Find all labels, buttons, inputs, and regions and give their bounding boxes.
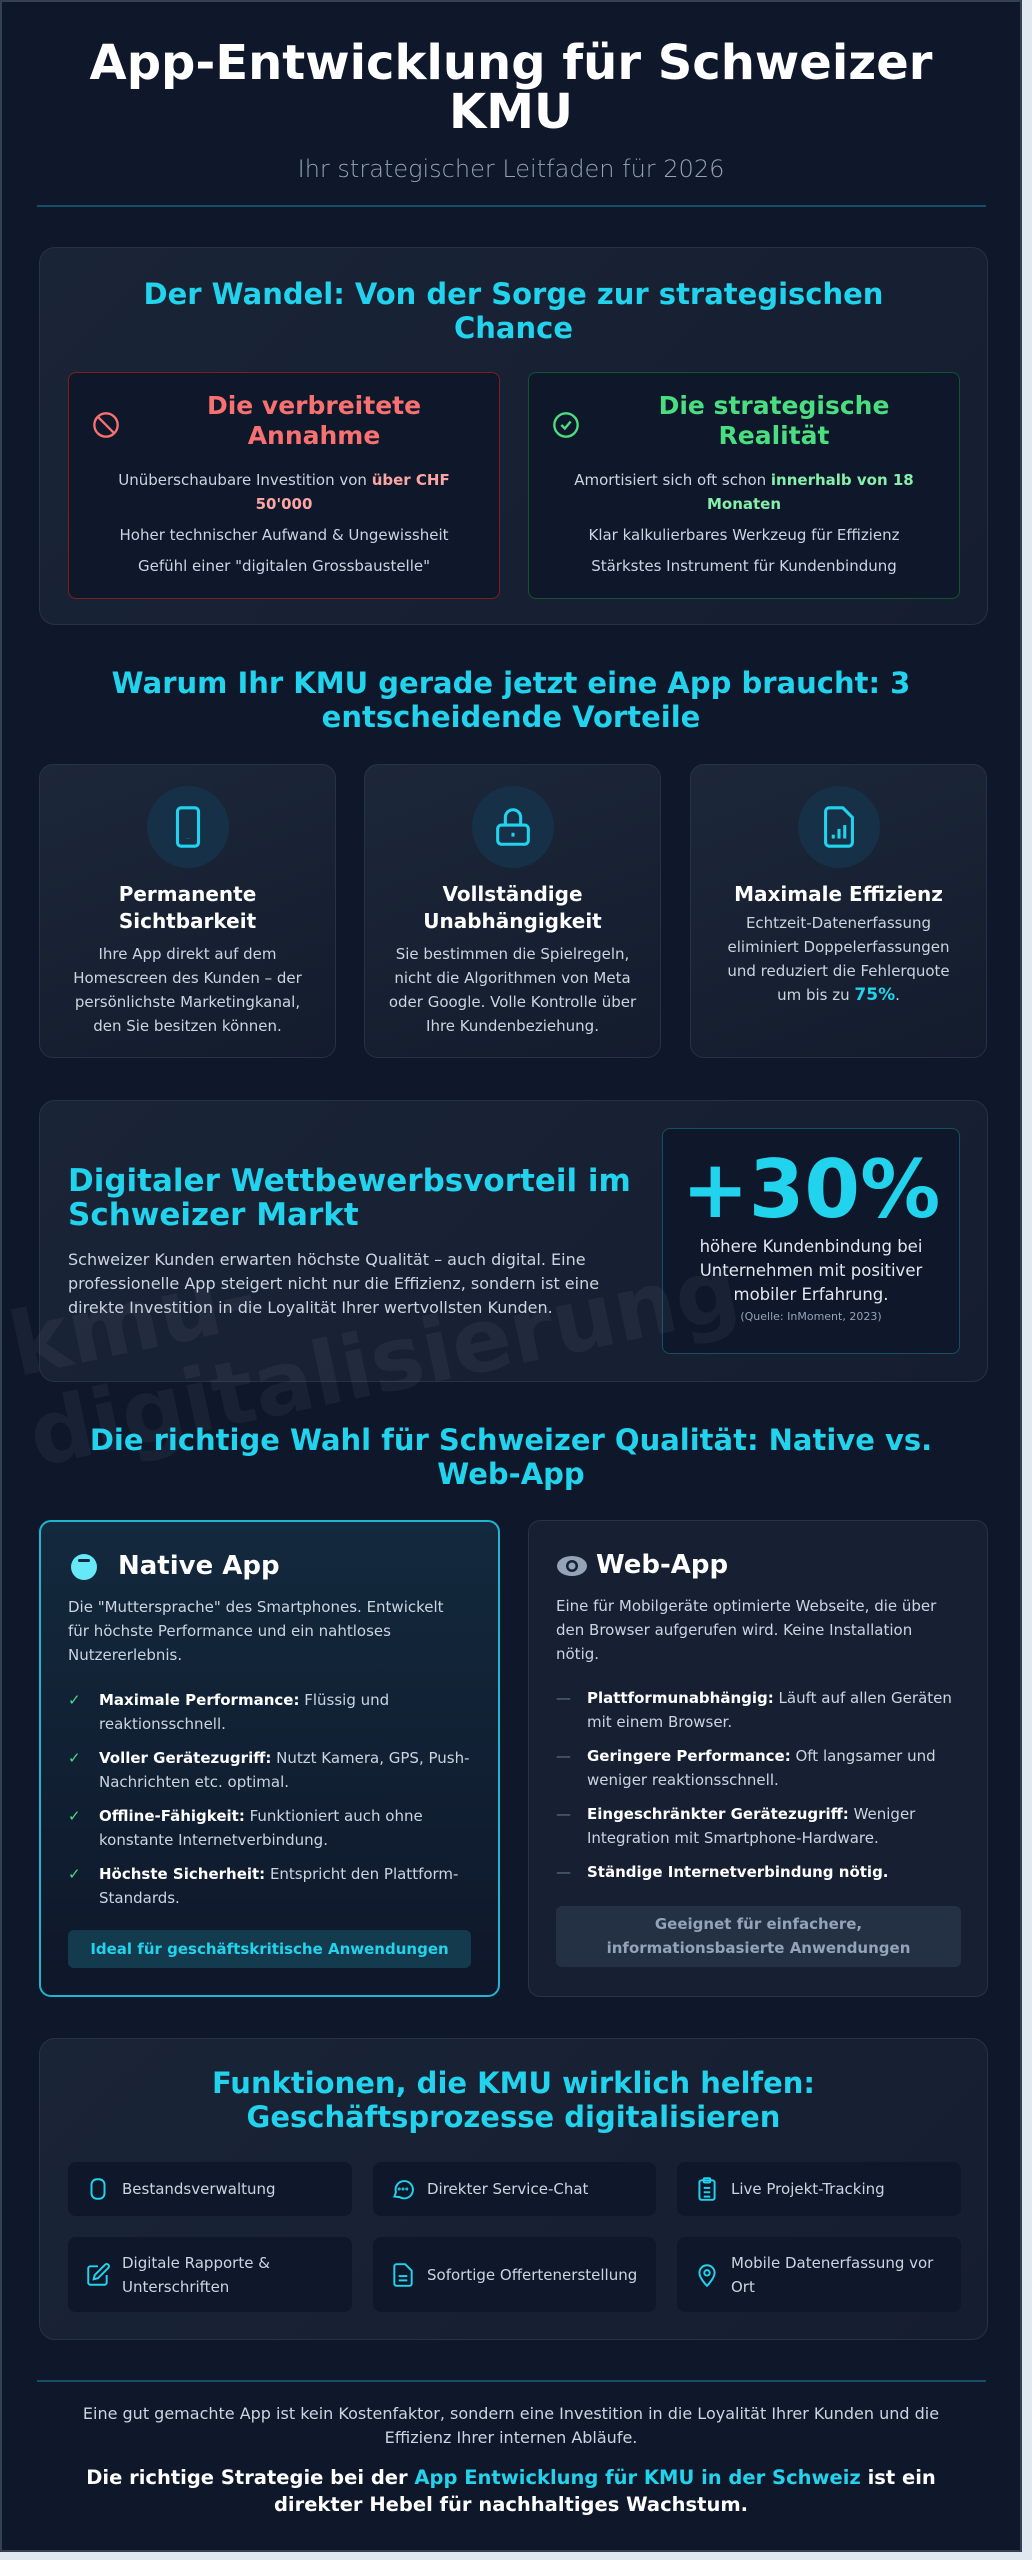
footer text: Eine gut gemachte App ist kein Kostenfaktor, sondern eine Investition in die Loyalität Ihrer Kunden und die Effizienz Ihrer internen Abläufe. [83,2404,939,2447]
heading: Der Wandel [144,277,883,345]
text: Realität list [574,471,914,575]
tile: Service-Chat [373,2162,656,2216]
stat box: +30%: höhere Kundenbindung bei [700,1237,922,1256]
text: Native desc: Die "Muttersprache" des Smartphones. Entwickelt für höchste Performance und ein nahtloses Nutzererlebnis. [68,1598,444,1664]
stat box: +30%: (Quelle: InMoment, 2023) [740,1310,882,1323]
card: Permanente Sichtbarkeit: Sichtbarkeit [119,909,256,933]
box: strategische Realität [528,372,960,599]
list: Web bullets: — [556,1689,571,1707]
heading: Realität: Die strategische [659,391,889,420]
tile: Bestandsverwaltung: Bestandsverwaltung [122,2180,276,2198]
heading: Wettbewerbsvorteil [68,1163,631,1233]
card: Permanente Sichtbarkeit: Permanente [119,882,256,906]
list: Native bullets [68,1691,470,1907]
heading: Annahme [207,391,421,450]
tile: Rapporte: Digitale Rapporte & [122,2254,270,2272]
icon: eye [557,1556,587,1576]
icon: ban [93,412,119,438]
tile: Projekt-Tracking [677,2162,961,2216]
heading: Realität: Realität [718,421,830,450]
heading: Wettbewerbsvorteil: Digitaler Wettbewerbsvorteil im [68,1163,631,1199]
tile: Rapporte [68,2237,352,2312]
heading: Native vs Web: Web-App [437,1457,585,1491]
tile: Service-Chat: Direkter Service-Chat [427,2180,588,2198]
title: App-Entwicklung für Schweizer [90,35,932,91]
heading: Native vs Web [90,1423,932,1491]
tile: Projekt-Tracking: Live Projekt-Tracking [731,2180,885,2198]
footer conclusion: Die richtige Strategie bei der App Entwicklung für KMU in der Schweiz ist ein direkter Hebel für nachhaltiges Wachstum. [86,2466,936,2516]
panel: Wettbewerbsvorteil [39,1100,988,1382]
list: Web bullets: — [556,1863,571,1881]
text: Realität list: Stärkstes Instrument für Kundenbindung [591,557,897,575]
tile: Offertenerstellung: Sofortige Offertenerstellung [427,2266,637,2284]
card: Unabhängigkeit: Sie bestimmen die Spielregeln, nicht die Algorithmen von Meta oder Google. Volle Kontrolle über Ihre Kundenbeziehung. [389,945,636,1035]
card: Permanente Sichtbarkeit [39,764,336,1058]
heading: 3 Vorteile: entscheidende Vorteile [322,700,700,734]
tile: Datenerfassung: Mobile Datenerfassung vor [731,2254,933,2272]
tile: Rapporte: Unterschriften [122,2278,229,2296]
button: Web [556,1906,961,1967]
text: Annahme list [118,471,450,575]
list: Web bullets [556,1689,952,1881]
panel: Web-App [528,1520,988,1997]
heading: Annahme: Die verbreitete [207,391,421,420]
button: Native [68,1930,471,1968]
stat box: +30% [662,1128,960,1354]
list: Native bullets: Voller Gerätezugriff: Nutzt Kamera, GPS, Push-Nachrichten etc. optimal. [99,1749,470,1791]
card: Effizienz: Echtzeit-Datenerfassung eliminiert Doppelerfassungen und reduziert die Fehlerquote um bis zu 75%. [727,914,950,1005]
heading: Native vs Web: Die richtige Wahl für Schweizer Qualität: Native vs. [90,1423,932,1457]
box: verbreitete Annahme [68,372,500,599]
list: Web bullets: — [556,1747,571,1765]
list: Web bullets: Eingeschränkter Gerätezugriff: Weniger Integration mit Smartphone-Hardware. [587,1805,915,1847]
tile: Datenerfassung [677,2237,961,2312]
text: Realität list: Klar kalkulierbares Werkzeug für Effizienz [588,526,900,544]
panel: Der Wandel [39,247,988,625]
list: Native bullets: ✓ [68,1749,81,1767]
title: KMU [449,84,573,140]
icon: lock [472,786,554,868]
title [90,35,932,140]
text: Realität list: Amortisiert sich oft schon innerhalb von 18 Monaten [574,471,914,513]
subtitle: Ihr strategischer Leitfaden für 2026 [298,155,724,183]
list: Native bullets: Maximale Performance: Flüssig und reaktionsschnell. [99,1691,389,1733]
heading: Funktionen [212,2066,815,2134]
tile: Offertenerstellung [373,2237,656,2312]
heading: Wettbewerbsvorteil: Schweizer Markt [68,1197,359,1233]
tile: Datenerfassung: Ort [731,2278,755,2296]
panel: Funktionen [39,2038,988,2340]
icon: native [71,1554,97,1580]
button: Web: informationsbasierte Anwendungen [607,1939,910,1957]
card: Effizienz [690,764,987,1058]
list: Native bullets: Offline-Fähigkeit: Funktioniert auch ohne konstante Internetverbindung. [99,1807,423,1849]
heading: Realität [659,391,889,450]
heading: Funktionen: Funktionen, die KMU wirklich helfen: [212,2066,815,2100]
list: Native bullets: ✓ [68,1865,81,1883]
watermark: digitalisierung [20,1236,748,1487]
tile: Bestandsverwaltung [68,2162,352,2216]
heading: Native App: Native App [118,1551,280,1581]
icon: file chart [798,786,880,868]
list: Web bullets: Geringere Performance: Oft langsamer und weniger reaktionsschnell. [587,1747,936,1789]
heading: 3 Vorteile [112,666,910,734]
list: Web bullets: Ständige Internetverbindung nötig. [587,1863,889,1881]
card: Permanente Sichtbarkeit: Ihre App direkt auf dem Homescreen des Kunden – der persönlichste Marketingkanal, den Sie besitzen können. [73,945,302,1035]
watermark: kmu- [1,1244,266,1397]
heading: Der Wandel: Der Wandel: Von der Sorge zur strategischen [144,277,883,311]
card: Unabhängigkeit: Vollständige [442,882,583,906]
card: Unabhängigkeit: Unabhängigkeit [423,909,602,933]
icon: phone [147,786,229,868]
list: Web bullets: Plattformunabhängig: Läuft auf allen Geräten mit einem Browser. [587,1689,952,1731]
list: Web bullets: — [556,1805,571,1823]
stat box: +30%: mobiler Erfahrung. [734,1285,888,1304]
icon: check circle [553,412,579,438]
text: Annahme list: Gefühl einer "digitalen Grossbaustelle" [138,557,430,575]
heading: Der Wandel: Chance [454,311,573,345]
heading: Web-App: Web-App [596,1550,728,1580]
button: Native: Ideal für geschäftskritische Anwendungen [90,1940,449,1958]
heading: Funktionen: Geschäftsprozesse digitalisieren [247,2100,780,2134]
heading: 3 Vorteile: Warum Ihr KMU gerade jetzt eine App braucht: 3 [112,666,910,700]
list: Native bullets: ✓ [68,1807,81,1825]
text: Wettbewerbsvorteil: Schweizer Kunden erwarten höchste Qualität – auch digital. Eine professionelle App steigert nicht nur die Effizienz, sondern ist eine direkte Investition in die Loyalität Ihrer wertvollsten Kunden. [68,1250,599,1317]
text: Annahme list: Unüberschaubare Investition von über CHF 50'000 [118,471,450,513]
list: Native bullets: Höchste Sicherheit: Entspricht den Plattform-Standards. [99,1865,458,1907]
card: Effizienz: Maximale Effizienz [734,882,943,906]
stat box: +30%: +30% [682,1143,940,1236]
list: Native bullets: ✓ [68,1691,81,1709]
stat box: +30%: Unternehmen mit positiver [700,1261,922,1280]
text: Annahme list: Hoher technischer Aufwand & Ungewissheit [120,526,448,544]
panel: Native App [39,1520,500,1997]
button: Web: Geeignet für einfachere, [655,1915,862,1933]
heading: Annahme: Annahme [248,421,380,450]
text: Web desc: Eine für Mobilgeräte optimierte Webseite, die über den Browser aufgerufen wird. Keine Installation nötig. [556,1597,936,1663]
card: Unabhängigkeit [364,764,661,1058]
